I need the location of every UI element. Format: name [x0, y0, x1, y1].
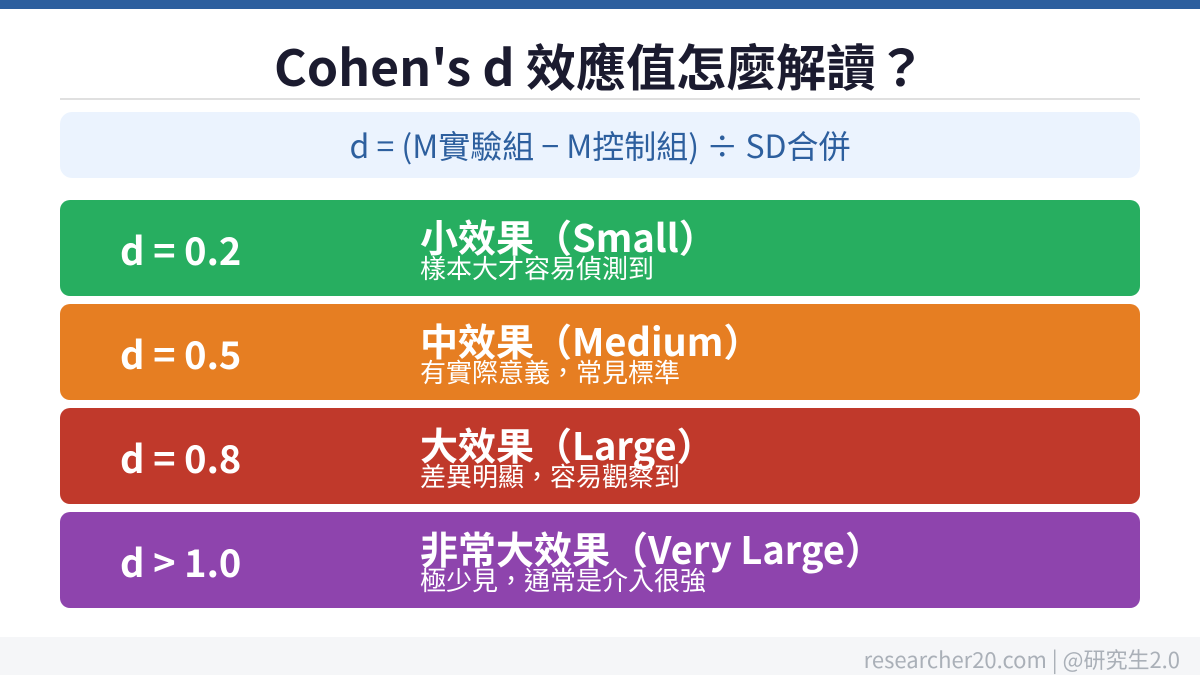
row: large: 差異明顯，容易觀察到	[420, 457, 680, 494]
row: small	[60, 200, 1140, 296]
row: small: 小效果（Small）	[420, 208, 717, 263]
row: medium: 中效果（Medium）	[420, 312, 761, 367]
row: small: 樣本大才容易偵測到	[420, 249, 654, 286]
row: large	[60, 408, 1140, 504]
row: very large: d > 1.0	[120, 533, 241, 588]
row: very large: 非常大效果（Very Large）	[420, 520, 883, 575]
top bar	[0, 0, 1200, 9]
title: Cohen's d 效應值怎麼解讀？	[274, 29, 926, 101]
row: medium: 有實際意義，常見標準	[420, 353, 680, 390]
formula box: d = (M實驗組 − M控制組) ÷ SD合併	[349, 122, 851, 168]
row: large: 大效果（Large）	[420, 416, 715, 471]
footer: researcher20.com | @研究生2.0	[864, 643, 1180, 675]
footer	[0, 637, 1200, 675]
row: medium: d = 0.5	[120, 325, 241, 380]
row: large: d = 0.8	[120, 429, 241, 484]
row: medium	[60, 304, 1140, 400]
row: small: d = 0.2	[120, 221, 241, 276]
row: very large: 極少見，通常是介入很強	[420, 561, 706, 598]
formula box	[60, 112, 1140, 178]
row: very large	[60, 512, 1140, 608]
